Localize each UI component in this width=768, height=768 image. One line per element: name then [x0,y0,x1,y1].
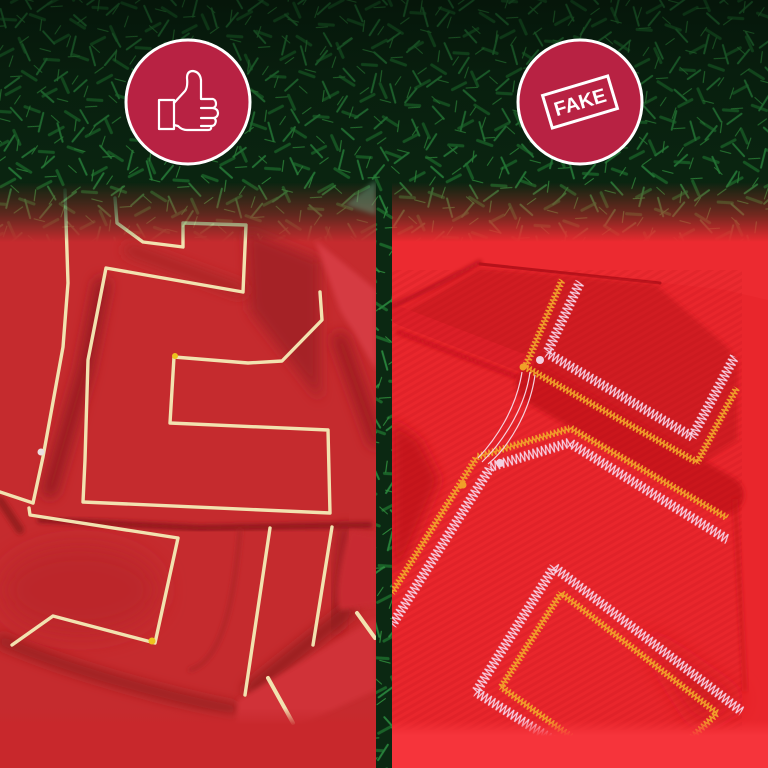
genuine stitching [0,190,375,723]
bottom band (right) [392,718,768,768]
panel: genuine jersey photo [0,170,376,768]
badge: fake [518,40,642,164]
stitching: orange rows [389,278,740,743]
grey-green patch at fold [345,180,376,215]
twill texture [392,270,742,296]
stitching: white rows [387,280,745,749]
loose threads [460,356,544,488]
panel: fake jersey photo [387,170,768,768]
fabric: fake base [392,262,768,736]
yellow thread ends [38,353,178,644]
bottom band (left) [222,709,304,726]
badge: thumbs up [126,40,250,164]
fabric folds (left) [0,230,376,725]
icon: fake stamp: FAKE [552,85,609,121]
fabric folds (right) [392,260,748,720]
fabric: genuine base [0,170,376,768]
icon: thumbs up [159,71,218,130]
